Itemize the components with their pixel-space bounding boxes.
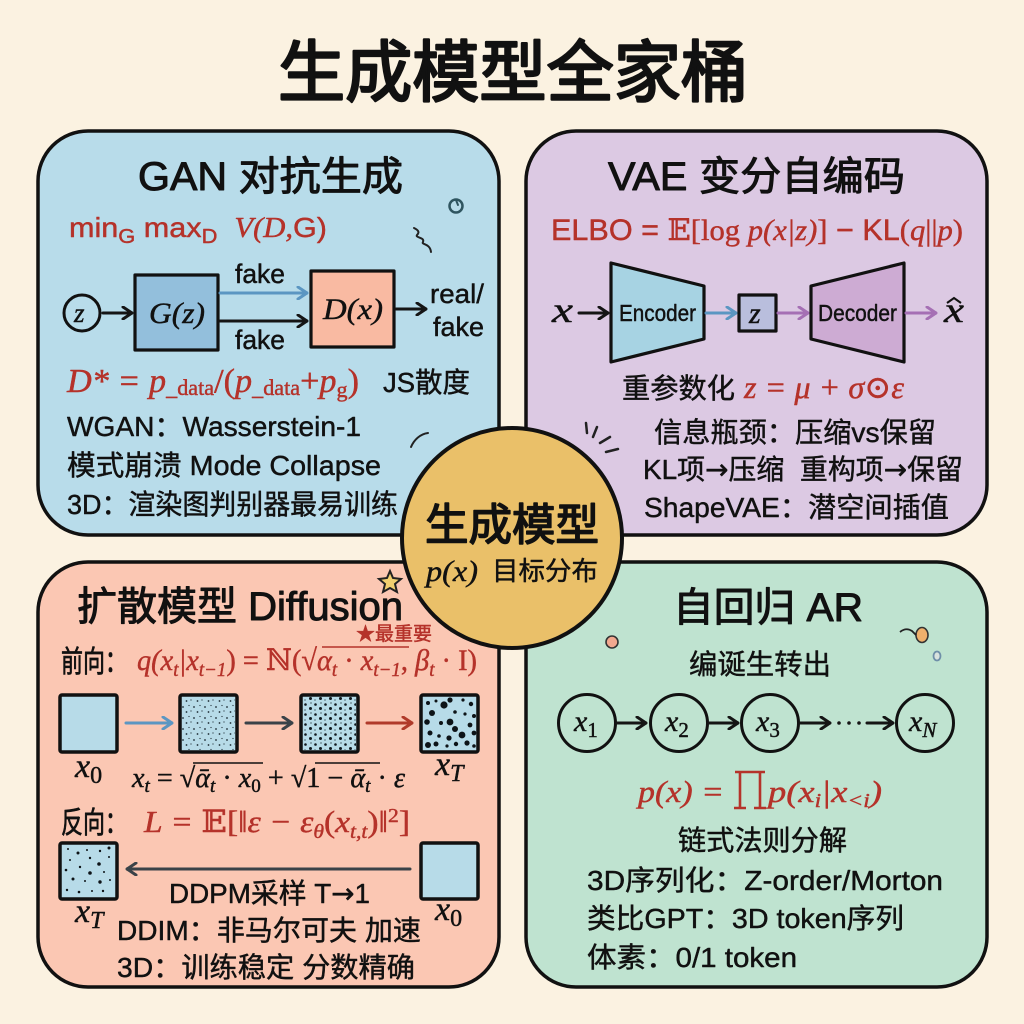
Diffusion notes: DDIM：非马尔可夫 加速: [117, 909, 421, 949]
label x0: 0: [90, 763, 102, 789]
forward formula: |x: [178, 644, 200, 677]
GAN objective formula: min: [69, 212, 114, 243]
decoder trapezoid: Decoder: [818, 300, 897, 326]
DDPM label: DDPM采样 T→1: [169, 877, 370, 910]
center hub: generative model: [402, 428, 622, 648]
sampling formula: ε: [394, 763, 405, 794]
sequence node xN: x: [909, 705, 922, 738]
sampling formula: 1 − ᾱ: [306, 763, 365, 794]
forward label: 前向：: [61, 637, 127, 681]
GAN notes: [67, 405, 398, 523]
chain rule formula: |x: [821, 774, 848, 809]
reverse stage xT: [60, 843, 117, 899]
Diffusion heading: 扩散模型 Diffusion: [77, 585, 403, 629]
latent z box: [739, 295, 776, 331]
optimal D formula: ): [348, 363, 359, 400]
sampling formula: 0: [251, 776, 261, 797]
forward formula: t: [332, 659, 338, 681]
fake label top: fake: [235, 259, 285, 289]
arrow: step 2: [246, 722, 292, 724]
doodles: GAN: [411, 200, 462, 447]
loss formula: (: [324, 804, 335, 839]
chain rule formula: p(x: [768, 774, 808, 809]
sampling formula: t: [365, 776, 371, 797]
VAE notes: KL项→压缩 重构项→保留: [643, 453, 963, 486]
AR notes: 体素：0/1 token: [587, 936, 797, 976]
AR notes: 类比GPT：3D token序列: [587, 897, 904, 937]
x input: x: [551, 290, 573, 330]
label x0: x: [75, 748, 90, 785]
arrow: encoder to z: [706, 312, 736, 314]
GAN objective formula: D: [202, 226, 217, 248]
JS divergence: JS散度: [383, 367, 470, 398]
real/fake label: [430, 279, 485, 342]
forward formula: t: [173, 659, 179, 681]
x hat output: x: [943, 290, 964, 330]
optimal D formula: /(: [214, 363, 235, 400]
generator box: G(z): [149, 297, 205, 330]
sequence node x2: [650, 694, 708, 752]
sampling formula: t: [210, 776, 216, 797]
GAN notes: 3D：渲染图判别器最易训练: [67, 483, 398, 523]
GAN notes: WGAN：Wasserstein-1: [67, 405, 361, 445]
label xT reverse: T: [90, 908, 105, 934]
chain rule formula: ): [867, 774, 882, 809]
forward formula: · I): [434, 644, 477, 677]
encoder trapezoid: Encoder: [619, 300, 696, 326]
optimal D formula: +: [300, 363, 319, 400]
label xT reverse: x: [75, 893, 90, 930]
GAN objective formula: G: [118, 226, 135, 248]
importance note: ★最重要: [356, 623, 432, 645]
panel: AR: [526, 562, 987, 987]
forward formula: x: [361, 644, 374, 677]
AR notes: 3D序列化 ：Z-order/Morton: [587, 859, 943, 899]
optimal D formula: _data: [251, 375, 300, 400]
doodle: VAE ticks: [586, 423, 618, 452]
optimal D formula: g: [337, 377, 348, 402]
icon: noise z circle: [64, 295, 100, 331]
arrow: z to G: [103, 312, 132, 314]
panel: GAN: [38, 131, 499, 535]
generator box: [135, 275, 218, 350]
noise stage xT: [421, 695, 478, 752]
VAE notes: 信息瓶颈：压缩vs保留: [654, 411, 936, 451]
GAN notes: 模式崩溃 Mode Collapse: [67, 450, 381, 481]
forward formula: β: [415, 644, 430, 677]
sampling formula: t: [145, 776, 151, 797]
sequence node xN: [896, 694, 954, 752]
optimal D formula: _data: [165, 375, 214, 400]
noise stage x0: [60, 695, 117, 752]
latent z box: z: [748, 297, 761, 330]
loss formula: )‖: [367, 804, 388, 839]
forward formula: q(x: [137, 644, 175, 677]
optimal D formula: p: [319, 363, 336, 400]
noise stage low: [180, 695, 237, 752]
loss formula: ]: [399, 804, 410, 839]
arrow: decoder to output: [906, 312, 936, 314]
arrow: x to encoder: [579, 312, 608, 314]
Diffusion notes: [117, 909, 421, 986]
forward formula: ) =: [226, 644, 266, 677]
GAN objective formula: max: [135, 212, 202, 243]
loss formula: L = 𝔼[‖ε − ε: [144, 804, 308, 840]
sequence node x3: [742, 694, 798, 752]
AR heading: 自回归 AR: [673, 586, 863, 630]
VAE heading: VAE 变分自编码: [608, 155, 905, 199]
real/fake label: fake: [433, 312, 484, 342]
arrow: step 3: [367, 722, 412, 724]
hub formula: p(x): [424, 555, 478, 588]
panel: Diffusion: [38, 562, 499, 987]
forward formula: t−1: [373, 659, 401, 681]
doodles: AR: [606, 628, 940, 660]
decoder trapezoid: [811, 263, 904, 362]
title: 生成模型全家桶: [278, 36, 748, 111]
ellipsis dots: [837, 721, 861, 725]
forward formula: ,: [401, 644, 415, 677]
sequence node x3: x: [756, 705, 769, 738]
arrow: z to decoder: [778, 312, 808, 314]
sampling formula: = √: [150, 763, 196, 794]
chain rule formula: p(x) =: [636, 774, 724, 809]
arrow: fake blue: [220, 292, 307, 294]
chain rule formula: [636, 772, 882, 812]
real/fake label: real/: [430, 279, 485, 309]
chain rule formula: i: [815, 790, 821, 812]
chain rule formula: <i: [847, 790, 870, 812]
arrow: x3 onward: [800, 722, 830, 724]
sequence node x1: [558, 694, 616, 752]
sampling formula: ᾱ: [195, 763, 210, 794]
label x0 reverse: 0: [450, 906, 462, 932]
arrow: x2 to x3: [709, 722, 738, 724]
noise stage mid: [301, 695, 358, 752]
reverse label: 反向：: [61, 798, 127, 842]
loss formula: t,t: [350, 821, 368, 843]
label xT: x: [435, 746, 450, 783]
GAN heading: GAN 对抗生成: [138, 155, 403, 199]
Diffusion notes: 3D：训练稳定 分数精确: [117, 946, 415, 986]
sampling formula: ·: [215, 763, 239, 794]
forward formula: t−1: [199, 659, 226, 681]
sampling formula: ·: [370, 763, 394, 794]
AR subtitle: 编诞生转出: [689, 649, 831, 680]
loss formula: x: [335, 804, 349, 839]
sampling formula: + √: [261, 763, 307, 794]
reparameterization: z = μ + σ⊙ε: [743, 369, 904, 405]
label xT: T: [450, 761, 465, 787]
arrow: output: [396, 308, 426, 310]
hub subtitle: 目标分布: [492, 556, 598, 586]
arrow: to xN: [867, 722, 893, 724]
arrow: fake black: [220, 320, 307, 322]
AR notes: [587, 859, 943, 976]
forward formula: ·: [337, 644, 361, 677]
reparameterization: [622, 369, 904, 405]
ELBO formula: ELBO = 𝔼[log p(x|z)] − KL(q||p): [551, 213, 963, 248]
icon: noise z circle: z: [73, 298, 85, 328]
sequence node x1: x: [574, 705, 587, 738]
reparameterization: 重参数化: [622, 373, 735, 404]
forward formula: [137, 643, 477, 681]
chain rule caption: 链式法则分解: [678, 825, 847, 856]
GAN objective formula: V(D,G): [234, 212, 324, 244]
panel: VAE: [526, 131, 987, 535]
optimal D formula: p: [235, 363, 252, 400]
sampling formula: [131, 763, 405, 797]
sampling formula: x: [132, 763, 144, 794]
sequence node x2: x: [665, 705, 678, 738]
sequence node x1: 1: [587, 718, 598, 742]
forward formula: t: [429, 659, 435, 681]
label x0 reverse: x: [435, 891, 450, 928]
forward formula: ℕ(√α: [266, 643, 333, 678]
arrow: step 1: [126, 722, 172, 724]
sequence node x3: 3: [769, 718, 780, 742]
discriminator box: [311, 271, 394, 347]
discriminator box: D(x): [322, 293, 383, 326]
VAE notes: ShapeVAE：潜空间插值: [644, 486, 949, 526]
sequence node x2: 2: [678, 718, 689, 742]
sequence node xN: N: [921, 718, 937, 742]
arrow: x1 to x2: [617, 722, 646, 724]
loss formula: 2: [388, 805, 399, 827]
optimal D formula: D* = p: [67, 363, 166, 400]
encoder trapezoid: [611, 263, 704, 362]
reverse stage x0: [421, 843, 478, 899]
fake label bottom: fake: [235, 325, 285, 355]
hub title: 生成模型: [425, 501, 599, 550]
loss formula: θ: [313, 821, 324, 843]
icon: star: [379, 571, 401, 592]
arrow: reverse: [127, 868, 410, 870]
sampling formula: x: [239, 763, 251, 794]
VAE notes: [643, 411, 963, 526]
